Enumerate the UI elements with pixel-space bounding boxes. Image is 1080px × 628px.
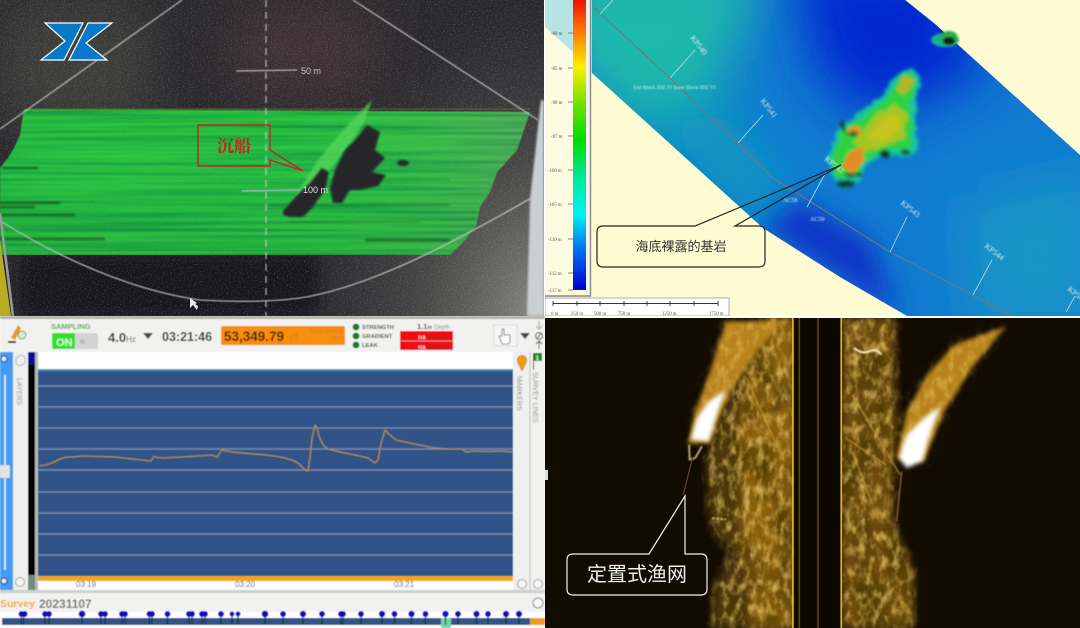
yellow sliver at lower left xyxy=(0,240,11,316)
status indicators xyxy=(353,324,394,349)
right seabed return xyxy=(842,318,914,628)
magnetic field readout: nT xyxy=(289,333,298,342)
KP labels: AC58 xyxy=(783,198,797,204)
sampling rate: 4.0Hz xyxy=(108,330,136,345)
time axis labels xyxy=(76,580,415,589)
depth readout: 1.1m Depth xyxy=(417,322,450,331)
KP labels xyxy=(633,34,1080,305)
left zoom rail xyxy=(0,352,13,590)
callout: exposed bedrock xyxy=(597,165,841,267)
sampling switch: SAMPLING xyxy=(51,322,91,331)
panel: multibeam sonar wreck view xyxy=(0,0,544,316)
magnetic field readout xyxy=(221,326,345,345)
survey title xyxy=(0,597,543,611)
layers tab: LAYERS xyxy=(15,378,22,405)
depth legend panel: -85 m xyxy=(551,67,563,72)
KP labels: KP544 xyxy=(983,241,1006,262)
bedrock outcrop xyxy=(826,68,922,188)
swath grain xyxy=(592,0,1080,316)
callout: fixed fishing net xyxy=(567,496,707,595)
light teal corner xyxy=(545,0,592,73)
depth legend panel: -80 m xyxy=(551,32,563,37)
markers tab xyxy=(514,352,529,590)
wreck bright return xyxy=(283,100,372,213)
KP labels: KP543 xyxy=(899,198,922,219)
left seabed return xyxy=(705,318,793,628)
KP tick lines xyxy=(600,0,1075,312)
range label: 100 m: 100 m xyxy=(303,185,328,195)
depth legend panel: -100 m xyxy=(548,169,562,174)
wreck acoustic shadow xyxy=(283,125,409,217)
scale bar: 750 m xyxy=(618,312,630,317)
magnetic field readout: 53,349.79 xyxy=(224,329,284,344)
sampling switch: ON xyxy=(56,337,73,349)
time axis labels: 03:19 xyxy=(76,580,97,589)
time axis labels: 03:20 xyxy=(235,580,256,589)
range label: 50 m: 50 m xyxy=(301,66,321,76)
survey lines tab xyxy=(530,352,545,590)
sampling switch xyxy=(51,322,98,349)
nadir channel xyxy=(793,318,841,628)
magnetometer chart xyxy=(38,352,513,590)
mouse cursor xyxy=(190,298,198,310)
sonar swath xyxy=(0,109,530,255)
depth strip xyxy=(28,352,38,590)
sampling rate xyxy=(108,330,153,345)
monitor frame strip xyxy=(0,213,13,316)
dark streaks on swath xyxy=(0,168,450,240)
KP labels: KP542 xyxy=(823,154,846,175)
depth legend panel: -117 m xyxy=(548,289,562,294)
scale bar: 1250 m xyxy=(662,312,677,317)
splitter xyxy=(0,590,545,593)
scale bar: 1750 m xyxy=(709,312,724,317)
app icon xyxy=(8,325,26,342)
status indicators: LEAK xyxy=(362,343,379,349)
KP labels: KP541 xyxy=(758,97,779,120)
sampling switch: III xyxy=(80,340,85,346)
scale bar: 250 m xyxy=(571,312,583,317)
callout: exposed bedrock: 海底裸露的基岩 xyxy=(635,239,727,254)
swath top edge xyxy=(25,108,530,110)
scale bar: 500 m xyxy=(594,312,606,317)
tool icons xyxy=(536,321,542,349)
route line xyxy=(593,7,1013,317)
logo xyxy=(41,23,112,60)
panel: side-scan sonar fishing net xyxy=(545,318,1080,628)
magnetic field readout: FULL-SCALE xyxy=(310,329,343,335)
markers tab: MARKERS xyxy=(515,376,522,411)
magnetic field readout: 1913 xyxy=(331,336,343,342)
layers tab xyxy=(13,352,28,590)
scale bar: 0 m xyxy=(551,312,559,317)
scale bar xyxy=(545,298,729,317)
side-scan returns in source coordinates xyxy=(683,318,1006,628)
depth legend panel: -97 m xyxy=(551,135,563,140)
status indicators: GRADIENT xyxy=(362,334,393,340)
depth readout: na Bottom xyxy=(418,344,447,351)
left image edge mark xyxy=(545,470,548,480)
screen edge xyxy=(527,100,544,316)
survey timeline xyxy=(0,611,545,628)
outcrop shadows xyxy=(837,121,910,187)
KP labels: Exit Block JDZ IV Enter Block JDZ VI xyxy=(633,85,716,91)
panel: magnetometer survey software xyxy=(0,316,545,628)
KP labels: KP540 xyxy=(688,34,709,57)
bathymetry swath xyxy=(592,0,1080,316)
panel: bathymetric map with exposed bedrock xyxy=(545,0,1080,330)
survey lines tab: 1 xyxy=(536,355,540,362)
depth legend panel xyxy=(545,0,590,296)
survey title: Survey xyxy=(0,598,35,610)
range arc and fan lines xyxy=(0,0,538,316)
small rock outcrop xyxy=(931,31,959,47)
depth legend panel: -90 m xyxy=(551,101,563,106)
depth readout: na Altitude xyxy=(418,334,448,341)
depth legend panel: -105 m xyxy=(548,203,562,208)
status indicators: STRENGTH xyxy=(362,325,394,331)
bright debris xyxy=(854,348,881,355)
survey title: 20231107 xyxy=(39,597,92,611)
clock: 03:21:46 xyxy=(162,330,212,344)
depth legend panel: -110 m xyxy=(548,238,562,243)
KP labels: AC59 xyxy=(810,217,824,223)
depth readout xyxy=(400,322,453,351)
left plume xyxy=(683,321,784,495)
seabed scratches xyxy=(746,378,900,505)
callout: sunken ship xyxy=(198,125,303,171)
depth legend panel: -112 m xyxy=(548,272,562,277)
callout: fixed fishing net: 定置式渔网 xyxy=(587,563,687,586)
toolbar xyxy=(0,316,545,351)
right plume xyxy=(897,326,1006,521)
time axis labels: 03:21 xyxy=(394,580,415,589)
callout: sunken ship: 沉船 xyxy=(217,132,251,157)
hand tool button xyxy=(494,325,530,346)
magnetic trace xyxy=(39,425,513,471)
survey lines tab: SURVEY LINES xyxy=(531,372,538,423)
